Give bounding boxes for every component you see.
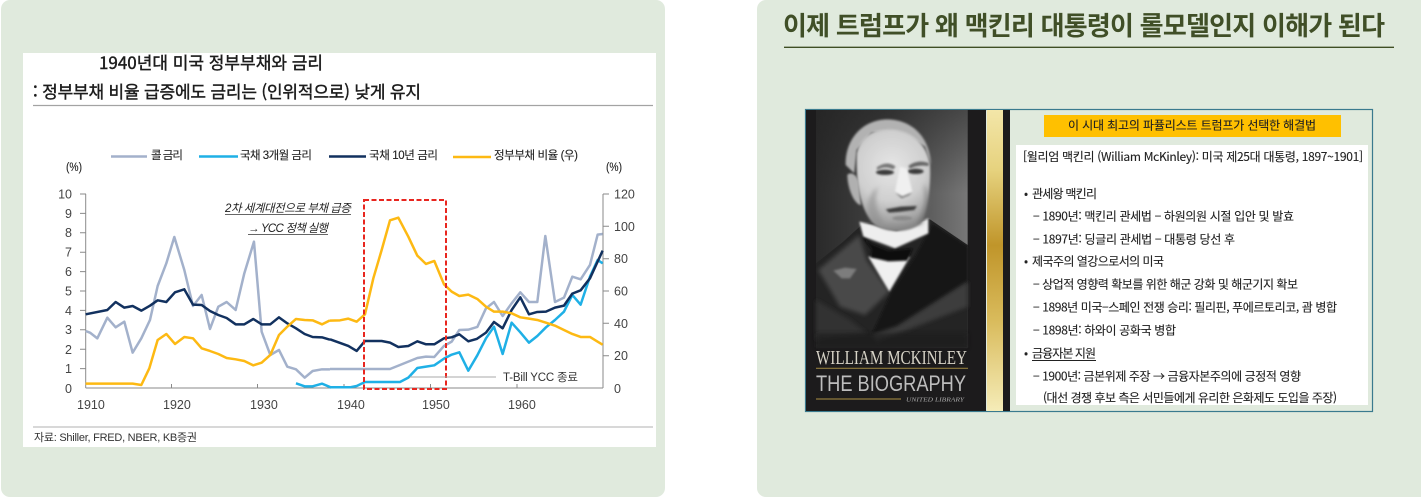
- portrait photo: [816, 110, 968, 348]
- right axis: (%): [606, 162, 622, 174]
- right axis: 40: [614, 317, 628, 331]
- section: tariff king: 관세왕 맥킨리: [1032, 185, 1097, 202]
- section: imperialism: − 상업적 영향력 확보를 위한 해군 강화 및 해군기지 확보: [1033, 276, 1298, 292]
- left axis: 5: [65, 284, 72, 298]
- header: [윌리엄 맥킨리 (William McKinley): 미국 제25대 대통령, 1897~1901]: [1023, 148, 1363, 165]
- section: tariff king: − 1897년: 딩글리 관세법 − 대통령 당선 후: [1033, 230, 1235, 248]
- legend: 국채 3개월 금리: [240, 149, 312, 162]
- source note: 자료: Shiller, FRED, NBER, KB증권: [34, 431, 197, 444]
- section: tariff king: − 1890년: 맥킨리 관세법 − 하원의원 시절 입안 및 발효: [1033, 208, 1294, 224]
- x axis: 1960: [508, 398, 536, 412]
- left axis: (%): [66, 162, 82, 174]
- cover title: WILLIAM MCKINLEY: [816, 347, 967, 369]
- panel: right background: [757, 0, 1421, 497]
- section: imperialism: − 1898년: 하와이 공화국 병합: [1033, 322, 1176, 338]
- section: financial capital: (대선 경쟁 후보 측은 서민들에게 유리한 은화제도 도입을 주장): [1043, 389, 1337, 406]
- annotation: YCC policy: [224, 202, 352, 235]
- x axis: 1930: [250, 398, 278, 412]
- left axis: 4: [65, 304, 72, 318]
- section: imperialism: [1024, 252, 1337, 338]
- line: 10-year treasury: [86, 251, 603, 351]
- section: financial capital: − 1900년: 금본위제 주장 → 금융자본주의에 긍정적 영향: [1033, 368, 1301, 384]
- x axis: 1950: [422, 398, 450, 412]
- line: 3-month treasury: [296, 260, 603, 387]
- right axis: 80: [614, 252, 628, 266]
- left axis: 8: [65, 226, 72, 240]
- section: imperialism: •: [1024, 252, 1028, 270]
- section: tariff king: •: [1024, 185, 1028, 202]
- section: financial capital: •: [1024, 344, 1028, 362]
- annotation: YCC policy: → YCC 정책 실행: [248, 222, 329, 235]
- left axis: 6: [65, 265, 72, 279]
- gold strip: [987, 110, 1003, 411]
- left axis: 2: [65, 343, 72, 357]
- cover publisher: UNITED LIBRARY: [906, 396, 966, 404]
- section: imperialism: − 1898년 미국−스페인 전쟁 승리: 필리핀, 푸에르토리코, 괌 병합: [1033, 298, 1337, 316]
- section: financial capital: [1024, 344, 1337, 406]
- right axis: 60: [614, 284, 628, 298]
- yellow heading label: [1044, 115, 1341, 137]
- left axis: 9: [65, 207, 72, 221]
- chart title line 1: 1940년대 미국 정부부채와 금리: [99, 49, 323, 74]
- line: government debt ratio: [86, 218, 603, 385]
- x axis: 1940: [337, 398, 365, 412]
- right axis: 100: [614, 220, 635, 234]
- annotation: YCC policy: 2차 세계대전으로 부채 급증: [224, 202, 352, 215]
- panel: book cover: [806, 110, 986, 411]
- panel: left background: [1, 0, 665, 497]
- callout: T-Bill YCC end: T-Bill YCC 종료: [503, 372, 578, 384]
- panel: slide frame: [806, 110, 1372, 412]
- right axis: 20: [614, 349, 628, 363]
- highlight: dashed red box: [364, 200, 446, 389]
- left axis: 0: [65, 382, 72, 396]
- legend: [111, 149, 578, 162]
- section: financial capital: 금융자본 지원: [1032, 344, 1096, 362]
- line: call rate: [86, 234, 603, 378]
- section: tariff king: [1024, 185, 1294, 248]
- right axis: [603, 162, 635, 396]
- yellow heading label: 이 시대 최고의 파퓰리스트 트럼프가 선택한 해결법: [1068, 116, 1316, 134]
- x axis: 1920: [163, 398, 191, 412]
- left axis: 7: [65, 246, 72, 260]
- left axis: 3: [65, 323, 72, 337]
- panel: chart card: [23, 49, 656, 447]
- right axis: 0: [614, 382, 621, 396]
- legend: 정부부채 비율 (우): [494, 149, 578, 162]
- right heading: 이제 트럼프가 왜 맥킨리 대통령이 롤모델인지 이해가 된다: [783, 6, 1385, 43]
- text panel: McKinley: [1016, 145, 1368, 406]
- left axis: 1: [65, 362, 72, 376]
- left axis: 10: [58, 188, 72, 202]
- x axis: [77, 384, 603, 412]
- section: imperialism: 제국주의 열강으로서의 미국: [1032, 252, 1164, 270]
- x axis: 1910: [77, 398, 105, 412]
- legend: 콜 금리: [151, 149, 183, 162]
- legend: 국채 10년 금리: [369, 149, 438, 162]
- right axis: 120: [614, 188, 635, 202]
- cover subtitle: THE BIOGRAPHY: [816, 371, 966, 396]
- chart title line 2: : 정부부채 비율 급증에도 금리는 (인위적으로) 낮게 유지: [33, 78, 421, 103]
- left axis: [58, 162, 86, 396]
